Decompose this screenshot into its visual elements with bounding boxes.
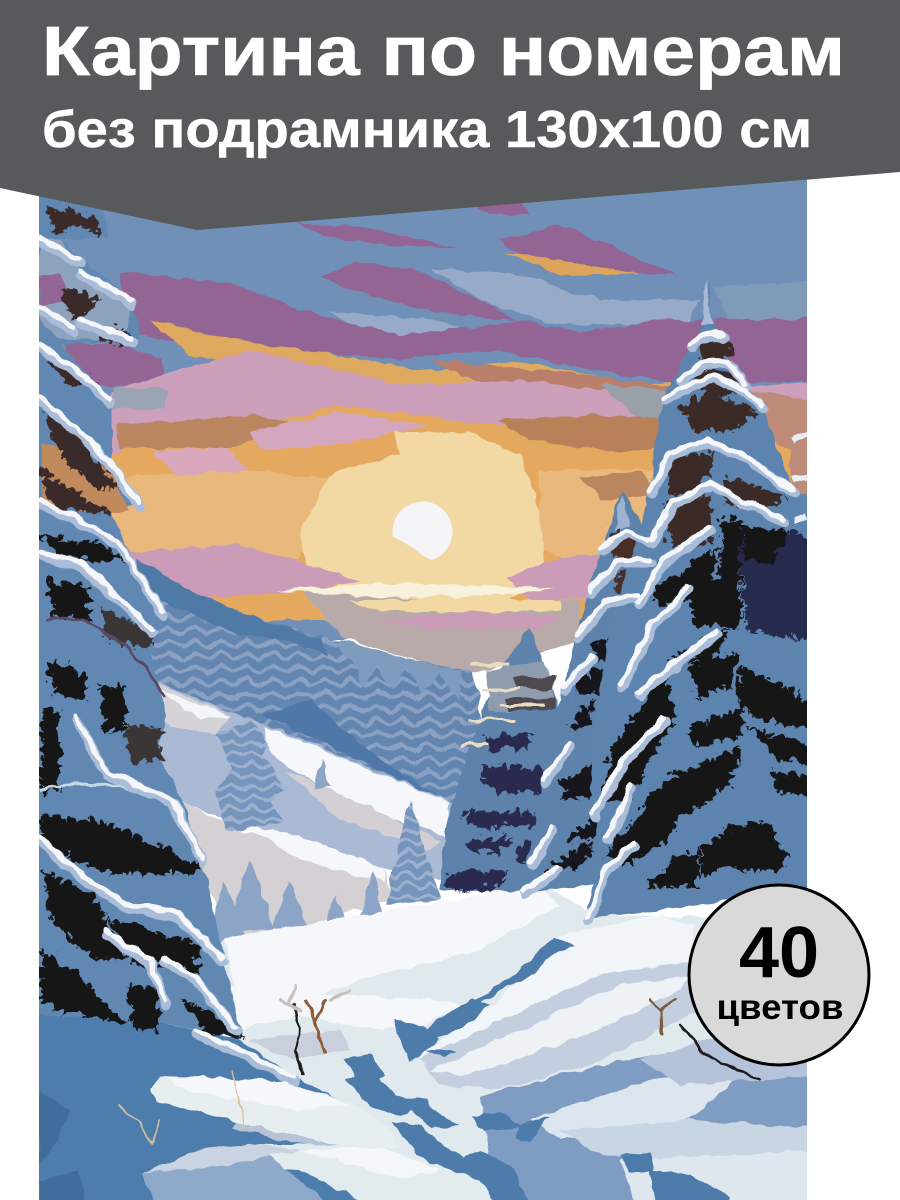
fir tree 2: [520, 490, 642, 893]
bare shrubs: [120, 985, 760, 1145]
fir tree 3: [440, 627, 565, 892]
left fir tree: [20, 195, 295, 1081]
footprint path: [345, 937, 730, 1200]
snow field: [20, 880, 830, 1200]
badge: 40 colours: [689, 885, 869, 1065]
header band: [0, 0, 900, 230]
large fir tree: [587, 278, 830, 918]
distant forest: [130, 558, 480, 820]
snow slopes: [158, 682, 452, 934]
painting: winter sunset: [15, 160, 835, 1200]
edge fill behind the trees: [796, 884, 807, 888]
title: Картина по номерам: [42, 12, 845, 90]
fir snow highlights: [523, 333, 795, 920]
badge number: 40: [739, 913, 819, 993]
subtitle: без подрамника 130х100 см: [42, 101, 812, 159]
snowy firs in the valley: [207, 720, 442, 940]
sun: [392, 502, 452, 560]
sky: [60, 180, 807, 672]
snow mounds: [142, 1076, 505, 1200]
badge label: цветов: [716, 988, 844, 1027]
